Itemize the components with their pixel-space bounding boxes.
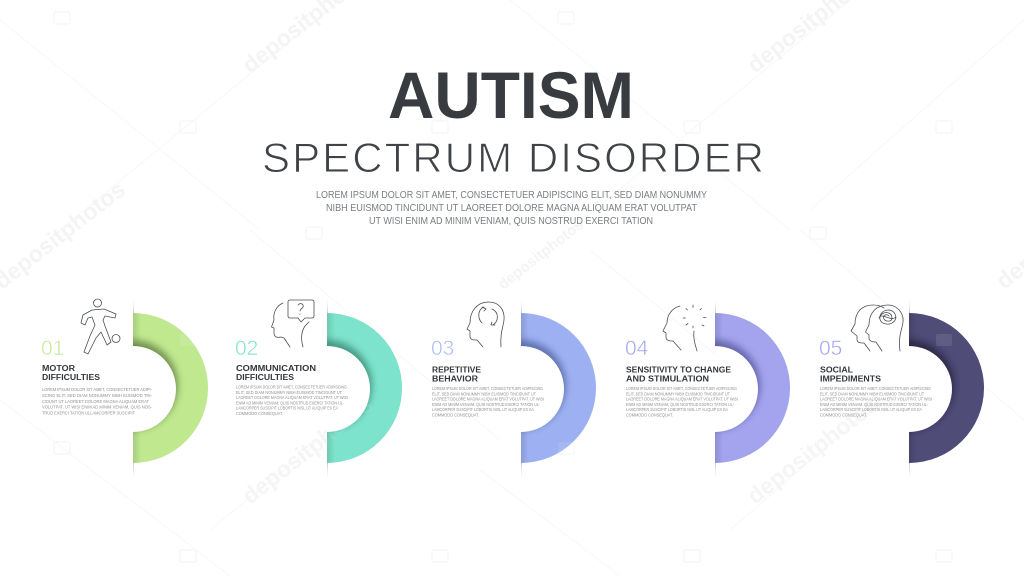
icon: head with radiating ticks bbox=[663, 305, 706, 351]
heading bbox=[236, 363, 316, 382]
body text: LAOREET DOLORE MAGNA ALIQUAM ERAT VOLUTPAT. UT WISI bbox=[432, 396, 544, 402]
watermark background: depositphotos bbox=[495, 216, 587, 293]
body text: ENIM AD MINIM VENIAM, QUIS NOSTRUD EXERCI TATION UL- bbox=[626, 402, 734, 407]
watermark background: depositphotos bbox=[237, 391, 378, 509]
heading: MOTOR bbox=[42, 363, 76, 373]
heading: SENSITIVITY TO CHANGE bbox=[626, 364, 731, 374]
heading bbox=[820, 364, 881, 384]
half ring 5 bbox=[909, 313, 984, 463]
body text: ENIM AD MINIM VENIAM, QUIS NOSTRUD EXERCI TATION UL- bbox=[820, 402, 928, 407]
body text: LOREM IPSUM DOLOR SIT AMET, CONSECTETUER ADIPISCING bbox=[432, 386, 543, 391]
body text: LAOREET DOLORE MAGNA ALIQUAM ERAT VOLUTPAT. UT WISI bbox=[626, 396, 738, 402]
number 03: 03 bbox=[431, 337, 454, 360]
intro text: LOREM IPSUM DOLOR SIT AMET, CONSECTETUER ADIPISCING ELIT, SED DIAM NONUMMY bbox=[316, 190, 707, 201]
number 02: 02 bbox=[235, 337, 258, 360]
body text: ELIT, SED DIAM NONUMMY NIBH EUISMOD TINCIDUNT UT bbox=[432, 392, 536, 396]
body text: LAOREET DOLORE MAGNA ALIQUAM ERAT VOLUTPAT. UT WISI bbox=[820, 396, 932, 402]
body text: COMMODO CONSEQUAT. bbox=[820, 412, 867, 418]
body text: LOREM IPSUM DOLOR SIT AMET, CONSECTETUER ADIPISCING bbox=[820, 386, 931, 391]
body text: LAMCORPER SUSCIPIT LOBORTIS NISL UT ALIQUIP EX EA bbox=[820, 407, 923, 412]
watermark overlay: depositphotos bbox=[237, 391, 378, 509]
body text: CIDUNT UT LAOREET DOLORE MAGNA ALIQUAM ERAT bbox=[42, 399, 149, 404]
heading: BEHAVIOR bbox=[432, 374, 479, 384]
watermark background: depositphotos bbox=[742, 391, 883, 509]
body text: TRUD EXERCI TATION ULLAMCORPER SUSCIPIT bbox=[42, 410, 135, 416]
watermark overlay: depositphotos bbox=[742, 391, 883, 509]
body text: ENIM AD MINIM VENIAM, QUIS NOSTRUD EXERCI TATION UL- bbox=[432, 402, 540, 407]
body text bbox=[432, 386, 544, 418]
body text: ELIT, SED DIAM NONUMMY NIBH EUISMOD TINCIDUNT UT bbox=[626, 392, 730, 396]
body text: COMMODO CONSEQUAT. bbox=[626, 412, 673, 418]
heading: AND STIMULATION bbox=[626, 374, 709, 384]
icon: head with repeat arrows bbox=[467, 302, 504, 347]
body text bbox=[626, 386, 738, 418]
panel: repetitive behavior bbox=[431, 300, 596, 478]
body text bbox=[820, 386, 932, 418]
body text bbox=[236, 384, 348, 416]
heading bbox=[432, 364, 481, 384]
intro text: UT WISI ENIM AD MINIM VENIAM, QUIS NOSTRUD EXERCI TATION bbox=[369, 216, 653, 227]
body text: LOREM IPSUM DOLOR SIT AMET, CONSECTETUER ADIPISCING bbox=[626, 386, 737, 391]
heading: DIFFICULTIES bbox=[42, 372, 100, 382]
body text: ENIM AD MINIM VENIAM, QUIS NOSTRUD EXERCI TATION UL- bbox=[236, 400, 344, 406]
icon: football player bbox=[81, 299, 120, 354]
number 04: 04 bbox=[625, 337, 649, 360]
heading: REPETITIVE bbox=[432, 364, 481, 374]
body text: COMMODO CONSEQUAT. bbox=[432, 412, 479, 418]
body text: LAMCORPER SUSCIPIT LOBORTIS NISL UT ALIQUIP EX EA bbox=[626, 407, 729, 412]
body text: ELIT, SED DIAM NONUMMY NIBH EUISMOD TINCIDUNT UT bbox=[236, 390, 342, 395]
body text: SCING ELIT, SED DIAM NONUMMY NIBH EUISMOD TIN- bbox=[42, 393, 152, 398]
icon: two heads with tangled thoughts bbox=[851, 305, 903, 351]
body text: COMMODO CONSEQUAT. bbox=[236, 411, 283, 416]
heading bbox=[626, 364, 731, 384]
body text bbox=[42, 387, 152, 416]
watermark overlay bbox=[180, 334, 952, 509]
half ring 3 bbox=[521, 313, 596, 463]
heading: SOCIAL bbox=[820, 364, 853, 374]
half ring 2 bbox=[327, 313, 402, 463]
intro text bbox=[316, 190, 707, 227]
number 01: 01 bbox=[41, 337, 64, 360]
half ring 4 bbox=[715, 313, 790, 463]
heading: IMPEDIMENTS bbox=[820, 374, 881, 384]
body text: LOREM IPSUM DOLOR SIT AMET, CONSECTETUER ADIPI- bbox=[42, 387, 152, 392]
subtitle: SPECTRUM DISORDER bbox=[262, 134, 764, 181]
panel: communication difficulties bbox=[235, 300, 402, 478]
heading bbox=[42, 363, 100, 382]
icon: head with question bubble bbox=[272, 300, 314, 347]
panel: sensitivity to change and stimulation bbox=[625, 300, 790, 478]
intro text: NIBH EUISMOD TINCIDUNT UT LAOREET DOLORE MAGNA ALIQUAM ERAT VOLUTPAT bbox=[326, 203, 698, 214]
half ring 1 bbox=[133, 313, 208, 463]
heading: COMMUNICATION bbox=[236, 363, 316, 373]
body text: LAMCORPER SUSCIPIT LOBORTIS NISL UT ALIQUIP EX EA bbox=[236, 406, 339, 410]
body text: ELIT, SED DIAM NONUMMY NIBH EUISMOD TINCIDUNT UT bbox=[820, 392, 924, 396]
title: AUTISM bbox=[388, 58, 634, 132]
number 05: 05 bbox=[819, 337, 842, 360]
body text: LAMCORPER SUSCIPIT LOBORTIS NISL UT ALIQUIP EX EA bbox=[432, 407, 535, 412]
body text: VOLUTPAT. UT WISI ENIM AD MINIM VENIAM, QUIS NOS- bbox=[42, 404, 152, 410]
heading: DIFFICULTIES bbox=[236, 372, 294, 382]
body text: LOREM IPSUM DOLOR SIT AMET, CONSECTETUER ADIPISCING bbox=[236, 384, 347, 390]
panel: motor difficulties bbox=[41, 299, 208, 478]
panel: social impediments bbox=[819, 300, 984, 478]
body text: LAOREET DOLORE MAGNA ALIQUAM ERAT VOLUTPAT. UT WISI bbox=[236, 395, 348, 400]
